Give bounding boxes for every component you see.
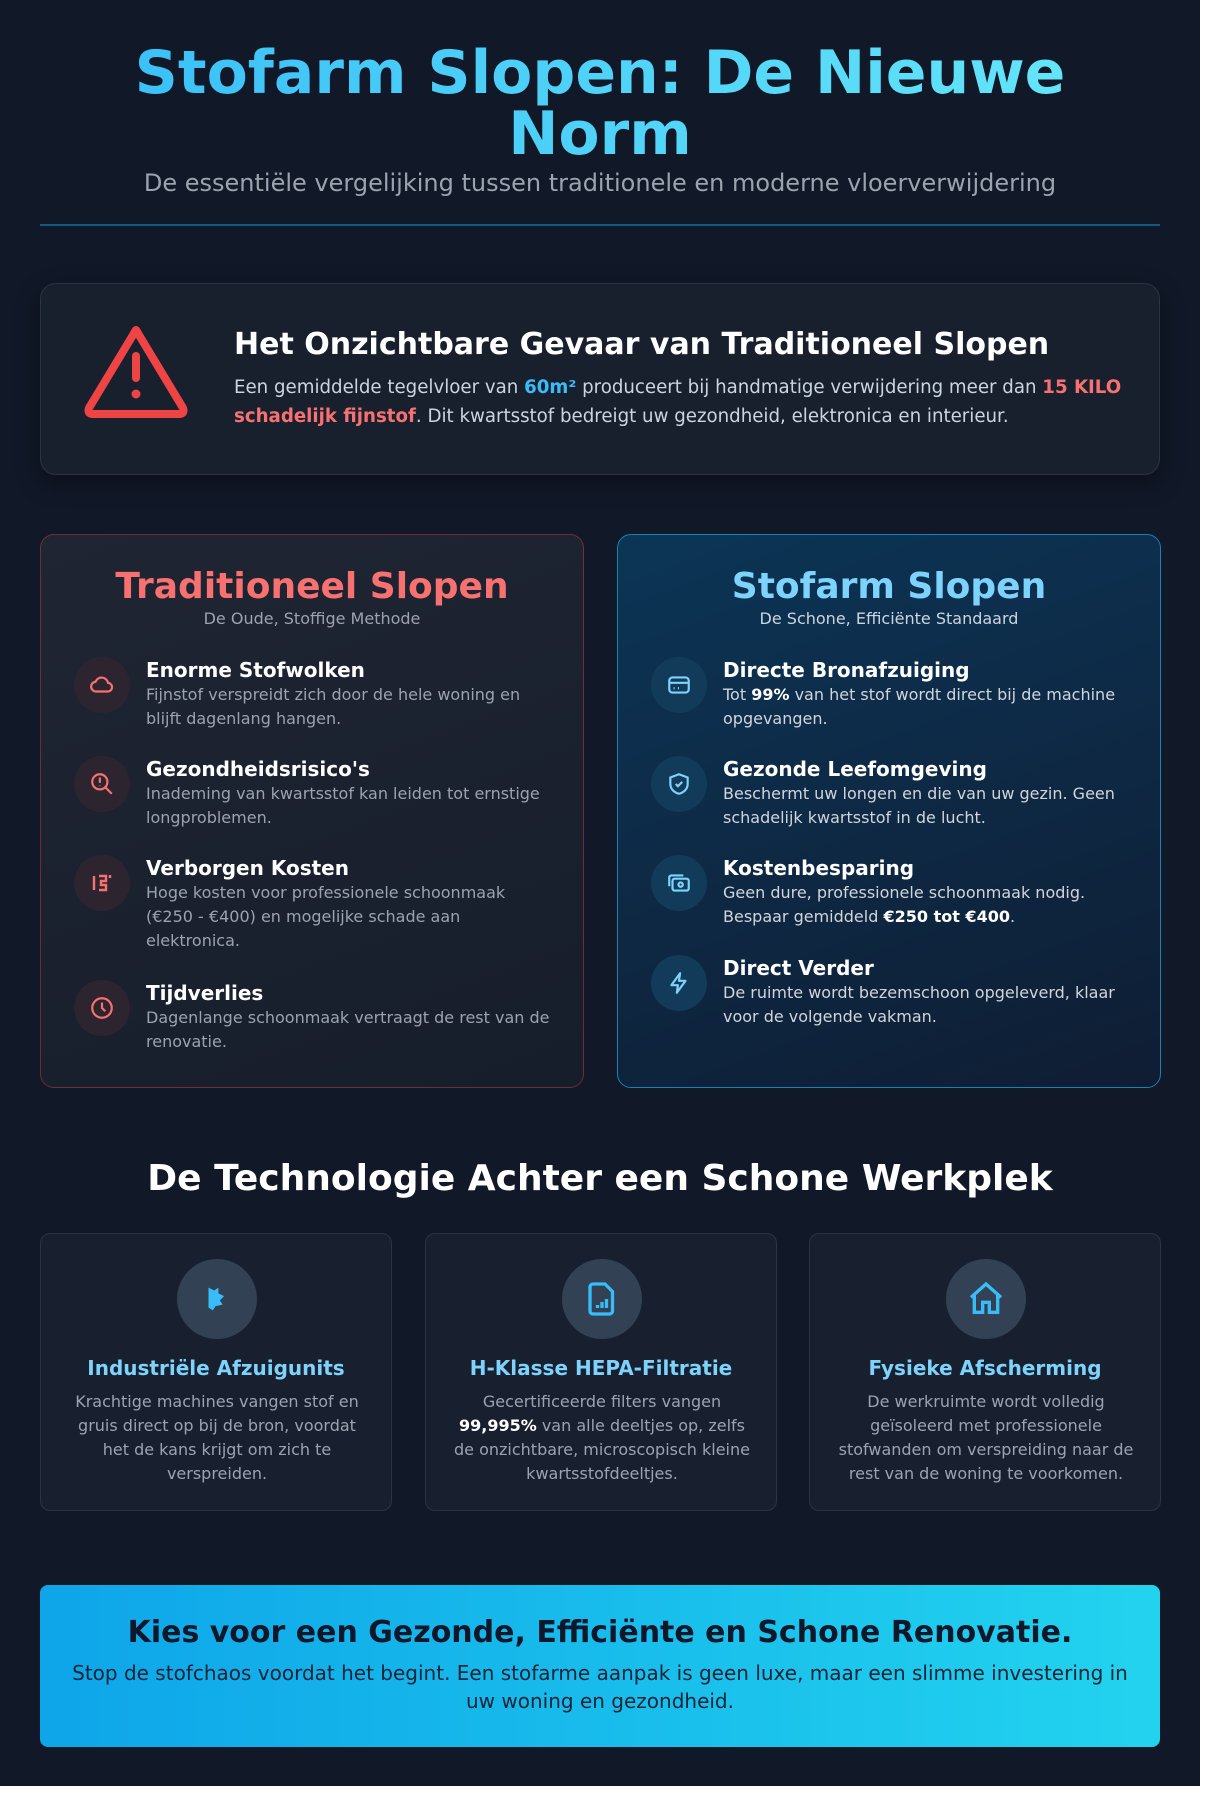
card: afzuigunits: Industriële Afzuigunits [87,1356,345,1380]
card: afscherming [809,1233,1161,1511]
banner: call to action: Kies voor een Gezonde, Efficiënte en Schone Renovatie. [128,1615,1072,1650]
panel: traditioneel slopen: Verborgen Kosten [146,856,349,880]
card: hepa: Gecertificeerde filters vangen 99,995% van alle deeltjes op, zelfs de onzichtbare, microscopisch kleine kwartsstofdeeltjes. [454,1392,750,1483]
panel: traditioneel slopen: Tijdverlies [146,981,263,1005]
icon: vacuum [177,1259,257,1339]
panel: stofarm slopen: Gezonde Leefomgeving [723,757,987,781]
panel: traditioneel slopen [40,534,584,1088]
panel: stofarm slopen: De ruimte wordt bezemschoon opgeleverd, klaar voor de volgende vakman. [723,983,1115,1026]
icon: house [946,1259,1026,1339]
card: afscherming: Fysieke Afscherming [868,1356,1102,1380]
title: Norm [508,99,692,169]
banner: call to action [40,1585,1160,1747]
panel: alert [40,283,1160,475]
card: afzuigunits [40,1233,392,1511]
item: gezondheid [74,756,540,827]
item: tijdverlies [74,980,550,1051]
panel: traditioneel slopen: Gezondheidsrisico's [146,757,370,781]
panel: stofarm slopen: Directe Bronafzuiging [723,658,970,682]
item: kostenbesparing [651,855,1085,926]
title [40,43,1160,165]
item: bronafzuiging [651,657,1115,728]
panel: traditioneel slopen: Hoge kosten voor professionele schoonmaak (€250 - €400) en mogelijke schade aan elektronica. [146,883,505,950]
icon: warning triangle [84,326,188,418]
card: hepa: H-Klasse HEPA-Filtratie [470,1356,732,1380]
title: Stofarm Slopen: De Nieuwe [135,38,1065,108]
panel: traditioneel slopen: Inademing van kwartsstof kan leiden tot ernstige longproblemen. [146,784,540,827]
item: kosten [74,855,505,950]
card: hepa [425,1233,777,1511]
panel: stofarm slopen [617,534,1161,1088]
alert heading: Het Onzichtbare Gevaar van Traditioneel Slopen [234,327,1049,362]
item: stofwolken [74,657,520,728]
item: leefomgeving [651,756,1115,827]
section heading: De Technologie Achter een Schone Werkplek [147,1158,1053,1199]
panel: traditioneel slopen: Dagenlange schoonmaak vertraagt de rest van de renovatie. [146,1008,550,1051]
column subtitle: De Schone, Efficiënte Standaard [760,609,1018,628]
column subtitle: De Oude, Stoffige Methode [204,609,420,628]
column heading: Stofarm Slopen [732,566,1046,607]
icon: filter document [562,1259,642,1339]
card: afscherming: De werkruimte wordt volledig geïsoleerd met professionele stofwanden om verspreiding naar de rest van de woning te voorkomen. [839,1392,1133,1483]
panel: stofarm slopen: Direct Verder [723,956,874,980]
banner: call to action: Stop de stofchaos voordat het begint. Een stofarme aanpak is geen luxe, maar een slimme investering in uw woning en gezondheid. [72,1661,1128,1713]
alert text: Een gemiddelde tegelvloer van 60m² produceert bij handmatige verwijdering meer dan 15 KILO schadelijk fijnstof. Dit kwartsstof bedreigt uw gezondheid, elektronica en interieur. [234,377,1121,427]
panel: traditioneel slopen: Fijnstof verspreidt zich door de hele woning en blijft dagenlang hangen. [146,685,520,728]
column heading: Traditioneel Slopen [115,566,509,607]
panel: stofarm slopen: Kostenbesparing [723,856,914,880]
panel: traditioneel slopen: Enorme Stofwolken [146,658,365,682]
panel: stofarm slopen: Tot 99% van het stof wordt direct bij de machine opgevangen. [723,685,1115,728]
panel: stofarm slopen: Beschermt uw longen en die van uw gezin. Geen schadelijk kwartsstof in de lucht. [723,784,1115,827]
card: afzuigunits: Krachtige machines vangen stof en gruis direct op bij de bron, voordat het de kans krijgt om zich te verspreiden. [75,1392,359,1483]
panel: stofarm slopen: Geen dure, professionele schoonmaak nodig. Bespaar gemiddeld €250 tot €400. [723,883,1085,926]
subtitle: De essentiële vergelijking tussen traditionele en moderne vloerverwijdering [144,169,1056,197]
item: direct verder [651,955,1115,1026]
